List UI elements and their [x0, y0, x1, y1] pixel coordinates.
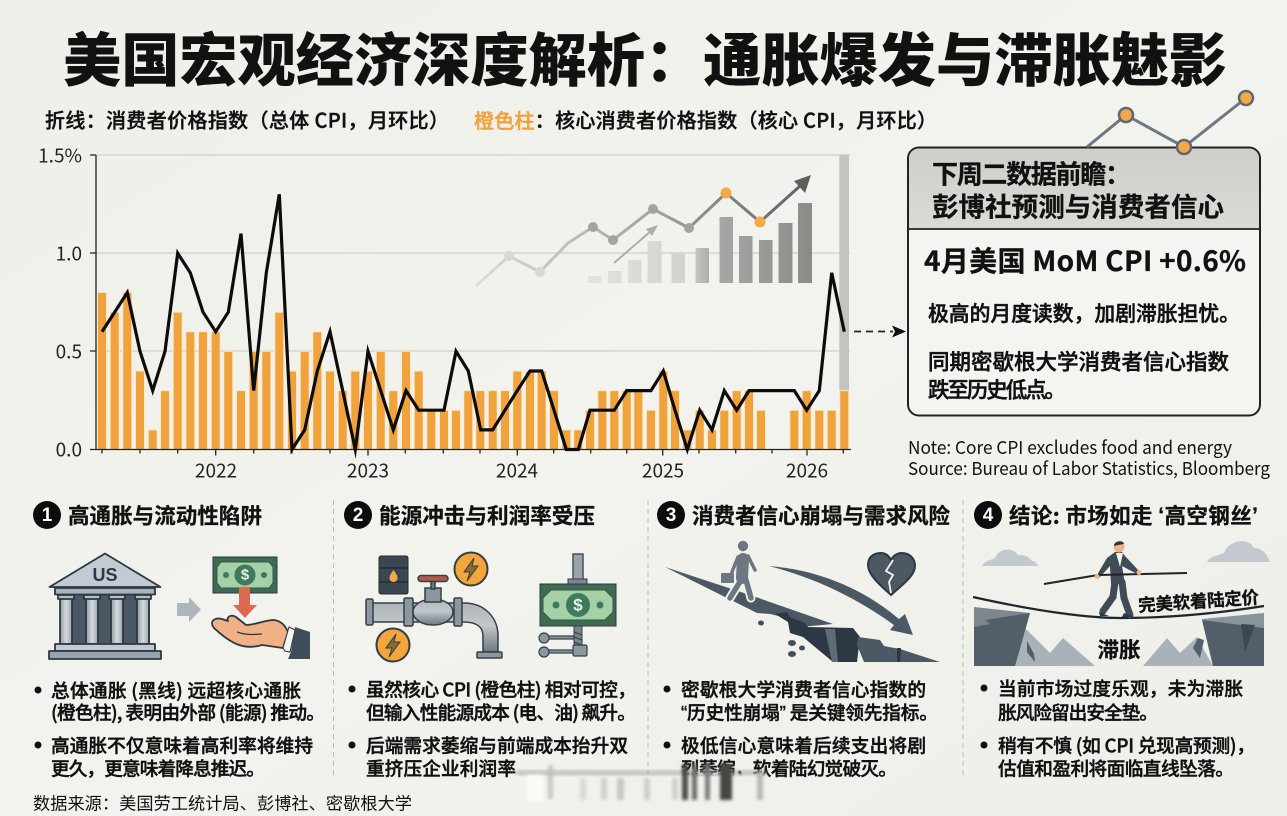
- icon: clouds: [982, 541, 1270, 566]
- panel 3: consumer confidence collapse: [657, 500, 950, 782]
- icon: money in a clamp: [539, 554, 616, 657]
- data source footer: 数据来源：美国劳工统计局、彭博社、密歇根大学: [33, 790, 412, 814]
- arrow: falling demand: [769, 566, 913, 635]
- number badge 3: 3: [666, 505, 676, 526]
- panel 2 bullets: 重挤压企业利润率: [366, 754, 516, 782]
- number badge 2: [344, 501, 372, 529]
- panel 2: energy shock and margin pressure: [344, 500, 636, 782]
- chart: y axis labels: 0.5: [56, 338, 82, 364]
- panel 3 heading: 消费者信心崩塌与需求风险: [692, 500, 950, 530]
- icon: US bank: US: [92, 565, 118, 585]
- icon: oil pipe with valve: [366, 576, 502, 658]
- box note two: 同期密歇根大学消费者信心指数: [928, 346, 1229, 376]
- number badge 1: 1: [42, 505, 53, 526]
- chart: background trend illustration: [476, 175, 812, 286]
- chart note and source: [908, 434, 1270, 481]
- number badge 3: [657, 501, 685, 529]
- chart note and source: Source: Bureau of Labor Statistics, Bloomberg: [908, 455, 1270, 481]
- panel 1 heading: 高通胀与流动性陷阱: [68, 500, 262, 530]
- chart: axes and ticks: [90, 155, 851, 456]
- icon: US bank: [49, 554, 161, 659]
- chart: x axis year labels: 2022: [195, 456, 237, 484]
- icon: tightrope walker: [1044, 541, 1187, 617]
- panel 4 bullets: 估值和盈利将面临直线坠落。: [998, 754, 1234, 782]
- number badge 2: 2: [353, 505, 363, 526]
- chart: x axis year labels: [195, 456, 828, 484]
- chart: x axis year labels: 2024: [496, 456, 538, 484]
- chart: y axis labels: [38, 142, 82, 462]
- legend: line series: 折线：消费者价格指数（总体 CPI，月环比）: [45, 104, 449, 134]
- panel 2 bullets: 后端需求萎缩与前端成本抬升双: [366, 732, 628, 758]
- panel 3 bullets: 密歇根大学消费者信心指数的: [681, 676, 926, 702]
- panel 3 bullets: [664, 676, 938, 782]
- tightrope: [973, 597, 1264, 618]
- chart note and source: Note: Core CPI excludes food and energy: [908, 434, 1233, 460]
- arrow: chart to forecast box: [854, 326, 906, 338]
- panel 4 bullets: 胀风险留出安全垫。: [998, 698, 1158, 726]
- panel 1 bullets: 总体通胀 (黑线) 远超核心通胀: [51, 676, 301, 704]
- panel 2 bullets: 但输入性能源成本 (电、油) 飙升。: [366, 698, 636, 726]
- panel 1 bullets: (橙色柱), 表明由外部 (能源) 推动。: [51, 698, 325, 726]
- box header background: [909, 148, 1259, 229]
- number badge 1: [33, 501, 61, 529]
- icon: money falling into hand: $: [241, 566, 250, 584]
- icon: lightning coins: [376, 552, 488, 662]
- box heading: [932, 154, 1224, 224]
- panel 3 bullets: 极低信心意味着后续支出将剧: [681, 732, 926, 758]
- chart: x axis year labels: 2023: [347, 456, 389, 484]
- panel 4 bullets: 当前市场过度乐观，未为滞胀: [998, 674, 1243, 702]
- label: perfect soft landing pricing: 完美软着陆定价: [1137, 584, 1260, 618]
- number badge 4: [974, 501, 1002, 529]
- legend: bar series: 橙色柱：核心消费者价格指数（核心 CPI，月环比）: [474, 104, 937, 134]
- box note two: [928, 346, 1229, 404]
- key figure: 4月美国 MoM CPI +0.6%: [924, 240, 1246, 280]
- panel: next Tuesday data preview: [908, 148, 1260, 416]
- chart: x axis year labels: 2025: [642, 456, 684, 484]
- chart: headline CPI black line: [102, 194, 844, 450]
- panel 1 bullets: 高通胀不仅意味着高利率将维持: [51, 732, 313, 758]
- panel 2 heading: 能源冲击与利润率受压: [379, 500, 595, 530]
- arrow: bank to money: [177, 597, 201, 622]
- icon: broken heart: [868, 553, 915, 595]
- icon: walking person with briefcase: [721, 541, 755, 598]
- legend: [45, 104, 937, 134]
- illustration: chasm cliffs and mountains: [974, 607, 1264, 666]
- panel 4 bullets: [980, 674, 1255, 782]
- box note two: 跌至历史低点。: [928, 374, 1066, 404]
- label: stagflation: 滞胀: [1097, 634, 1141, 664]
- blurred watermark smear: [516, 764, 766, 804]
- chart: core CPI orange bars: [98, 292, 849, 450]
- panel 4 heading: 结论: 市场如走 ‘高空钢丝’: [1009, 500, 1258, 530]
- panel 3 bullets: “历史性崩塌” 是关键领先指标。: [681, 698, 938, 726]
- icon: collapsing road: [665, 567, 940, 662]
- chart: y axis labels: 0.0: [56, 436, 82, 462]
- panel 1 bullets: [34, 676, 325, 782]
- number badge 4: 4: [983, 505, 994, 526]
- icon: money falling into hand: [212, 557, 310, 659]
- chart: CPI line and core CPI bars: [38, 142, 851, 484]
- box heading: 彭博社预测与消费者信心: [932, 186, 1224, 224]
- panel 2 bullets: 虽然核心 CPI (橙色柱) 相对可控，: [366, 676, 636, 702]
- box note one: 极高的月度读数，加剧滞胀担忧。: [928, 297, 1240, 327]
- chart: y axis labels: 1.0: [56, 240, 82, 266]
- chart: highlighted latest month column: [839, 155, 849, 395]
- panel 1 bullets: 更久，更意味着降息推迟。: [51, 754, 265, 782]
- panel 4: conclusion tightrope: [973, 500, 1270, 782]
- box heading: 下周二数据前瞻：: [932, 154, 1131, 192]
- panel 3 bullets: 烈萎缩，软着陆幻觉破灭。: [681, 754, 897, 782]
- chart: y axis labels: 1.5%: [38, 142, 82, 168]
- icon: money in a clamp: $: [573, 596, 583, 614]
- panel 4 bullets: 稍有不慎 (如 CPI 兑现高预测)，: [998, 732, 1255, 758]
- panel 1: high inflation and liquidity trap: [33, 500, 325, 782]
- icon: rising line top right: [1087, 91, 1253, 154]
- title: 美国宏观经济深度解析：通胀爆发与滞胀魅影: [63, 14, 1227, 98]
- panel 2 bullets: [348, 676, 636, 782]
- chart: x axis year labels: 2026: [786, 456, 828, 484]
- icon: oil barrel: [379, 556, 408, 594]
